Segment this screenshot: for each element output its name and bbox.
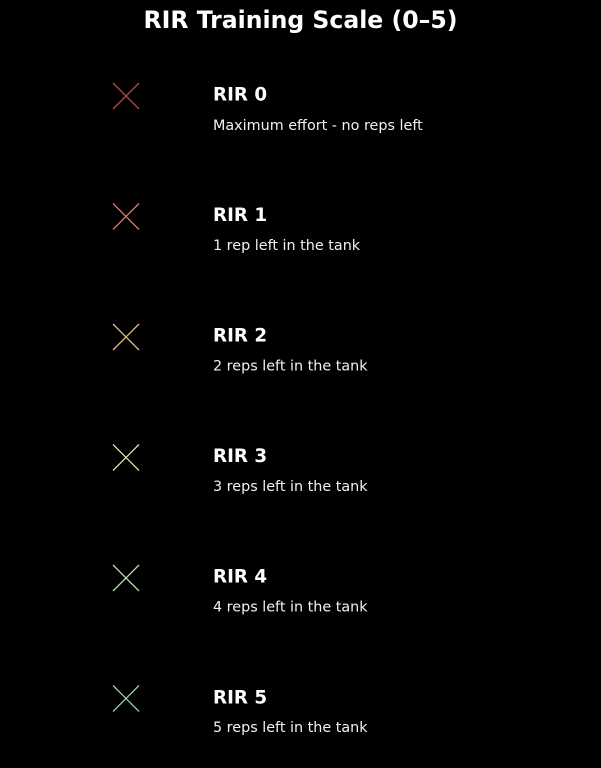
- heading: RIR 3: RIR 3: [213, 446, 267, 467]
- description: RIR 0: Maximum effort - no reps left: [213, 118, 423, 134]
- description: RIR 1: 1 rep left in the tank: [213, 238, 361, 254]
- row: RIR 1: [113, 204, 361, 254]
- description: RIR 3: 3 reps left in the tank: [213, 479, 368, 495]
- heading: RIR 0: RIR 0: [213, 84, 267, 106]
- row: RIR 2: [113, 324, 368, 374]
- row: RIR 3: [113, 444, 368, 495]
- icon: X marker RIR 2: [113, 324, 139, 350]
- row: RIR 4: [113, 565, 368, 616]
- description: RIR 2: 2 reps left in the tank: [213, 358, 368, 374]
- heading: RIR 2: RIR 2: [213, 326, 267, 346]
- icon: X marker RIR 0: [113, 83, 139, 109]
- heading: RIR 5: RIR 5: [213, 688, 267, 708]
- icon: X marker RIR 5: [113, 686, 139, 712]
- heading: RIR 1: RIR 1: [213, 205, 267, 226]
- heading: RIR 4: RIR 4: [213, 566, 267, 588]
- icon: X marker RIR 1: [113, 204, 139, 230]
- title: RIR Training Scale (0–5): [143, 6, 458, 34]
- description: RIR 5: 5 reps left in the tank: [213, 720, 368, 736]
- row: RIR 5: [113, 686, 368, 736]
- icon: X marker RIR 3: [113, 444, 139, 470]
- row: RIR 0: [113, 83, 423, 134]
- description: RIR 4: 4 reps left in the tank: [213, 600, 368, 616]
- icon: X marker RIR 4: [113, 565, 139, 591]
